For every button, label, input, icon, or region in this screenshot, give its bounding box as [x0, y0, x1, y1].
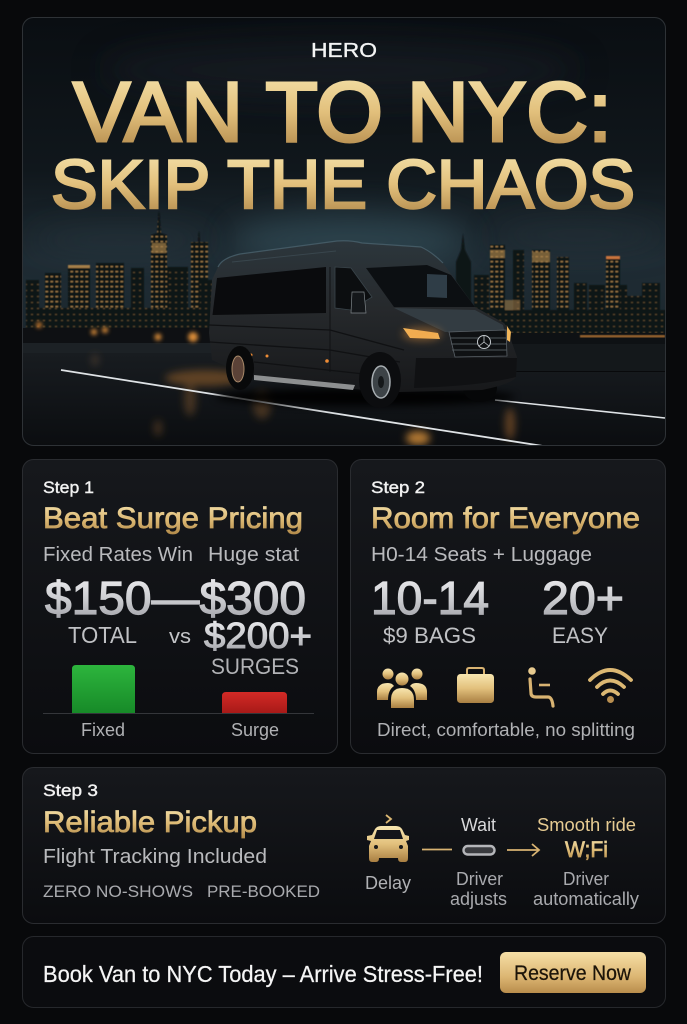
- bar chart: [43, 665, 314, 740]
- button: [500, 952, 646, 993]
- body lines: [209, 325, 404, 374]
- panel: step 2: [350, 460, 666, 754]
- panel: step 1: [22, 460, 338, 754]
- icon: car: [367, 815, 409, 862]
- hood highlight: [394, 308, 505, 333]
- bumper: [414, 358, 517, 388]
- vs: vs: [169, 626, 191, 648]
- title line 2: SKIP THE CHAOS: [51, 146, 635, 223]
- button label: Reserve Now: [514, 962, 632, 985]
- panel: call to action: [22, 936, 666, 1008]
- tag: pre-booked: PRE-BOOKED: [207, 882, 320, 901]
- label: smooth ride: Smooth ride: [537, 815, 636, 835]
- barrier and far shore: [22, 328, 212, 344]
- road markings: [61, 370, 543, 446]
- hero label: HERO: [311, 40, 377, 62]
- van: [209, 241, 517, 408]
- label: driver automatically: Driver: [563, 869, 609, 889]
- label: driver automatically: automatically: [533, 889, 639, 909]
- arrow: [507, 844, 539, 856]
- title line 1: VAN TO NYC:: [73, 65, 612, 159]
- hero border: [22, 18, 666, 446]
- heading: Reliable Pickup: [43, 806, 257, 839]
- caption: Direct, comfortable, no splitting: [377, 720, 635, 740]
- icon: people: [377, 668, 427, 708]
- windshield: [366, 265, 475, 307]
- icon: seat: [528, 667, 553, 706]
- bar: fixed: [72, 665, 135, 713]
- side markers: [250, 354, 329, 363]
- label: driver adjusts: adjusts: [450, 889, 507, 909]
- panel: step 3: [22, 768, 666, 924]
- road: [23, 353, 665, 428]
- sky clouds: [150, 50, 530, 78]
- sky glow behind van: [230, 214, 470, 266]
- icon: pill: [464, 846, 494, 854]
- door window: [335, 267, 372, 310]
- bar: surge: [222, 692, 287, 713]
- skyline: [26, 212, 666, 334]
- side step: [254, 375, 355, 390]
- icon: luggage: [457, 668, 494, 703]
- side windows: [212, 267, 326, 315]
- big stat: $150—$300: [45, 572, 306, 624]
- subheading: Flight Tracking Included: [43, 846, 267, 868]
- connector line: [422, 848, 452, 850]
- roof highlight: [218, 241, 443, 267]
- label: wifi: W;Fi: [565, 837, 608, 862]
- label: delay: Delay: [365, 873, 411, 893]
- subheading: H0-14 Seats + Luggage: [371, 544, 592, 566]
- front wheel: [359, 352, 401, 408]
- label: bags: $9 BAGS: [383, 623, 476, 648]
- label: fixed: Fixed: [81, 720, 125, 740]
- road reflections: [92, 354, 515, 445]
- flow diagram: [365, 815, 639, 909]
- label: wait: Wait: [461, 815, 496, 835]
- heading: Beat Surge Pricing: [43, 502, 303, 535]
- mirror: [351, 292, 366, 313]
- step label: Step 3: [43, 781, 98, 800]
- stat: bags: 20+: [542, 572, 624, 624]
- label: driver adjusts: Driver: [456, 869, 503, 889]
- panel: hero: [22, 17, 670, 446]
- city lights: [36, 322, 665, 342]
- label: easy: EASY: [552, 623, 608, 648]
- headlight: [403, 328, 440, 339]
- tag: no-shows: ZERO NO-SHOWS: [43, 882, 193, 901]
- label: surge: Surge: [231, 720, 279, 740]
- surges label: SURGES: [211, 654, 299, 679]
- hero title: [51, 65, 635, 223]
- rear wheel: [226, 346, 254, 390]
- cta text: Book Van to NYC Today – Arrive Stress-Free!: [43, 961, 483, 987]
- note: Huge stat: [208, 544, 299, 566]
- hero sky: [23, 34, 665, 328]
- far front wheel: [482, 386, 497, 392]
- icon: wifi: [590, 670, 631, 702]
- stat: seats: 10-14: [371, 572, 489, 624]
- surge stat: $200+: [204, 615, 312, 656]
- heading: Room for Everyone: [371, 502, 640, 535]
- van body: [209, 241, 517, 392]
- label: driver automatically: [533, 869, 639, 909]
- label: driver adjusts: [450, 869, 507, 909]
- subheading: Fixed Rates Win: [43, 544, 193, 566]
- step label: Step 1: [43, 478, 94, 497]
- step label: Step 2: [371, 478, 425, 497]
- total label: TOTAL: [68, 622, 137, 648]
- grille: [449, 330, 507, 357]
